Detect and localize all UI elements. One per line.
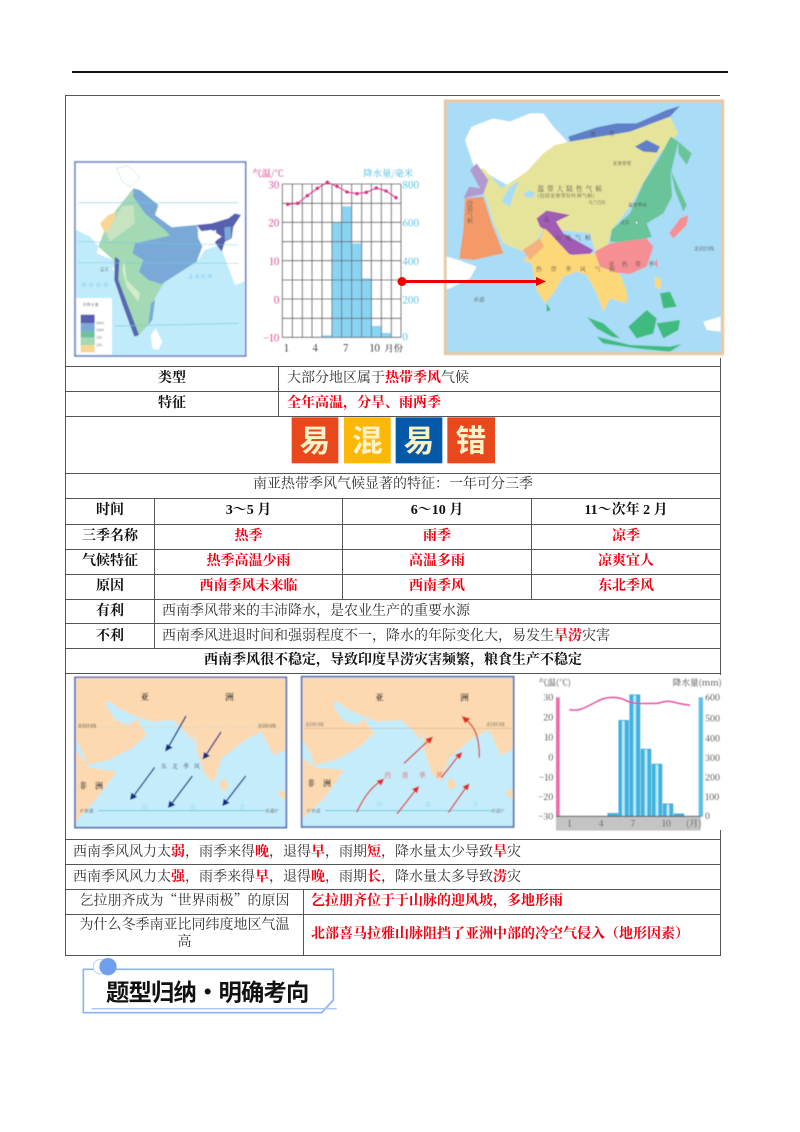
banner: 易混易错 [292, 415, 495, 463]
map: India annual precipitation: 阿拉伯海 [82, 282, 111, 289]
text: 特征 description: 全年高温，分旱、雨两季 [287, 396, 441, 411]
map: northeast monsoon: 度 [190, 802, 196, 811]
map: southwest monsoon: 非洲 [307, 778, 339, 789]
map: northeast monsoon: 赤道0° [265, 807, 279, 814]
map: southwest monsoon: 印 [377, 800, 383, 809]
text: 三季 summary: 南亚热带季风气候显著的特征：一年可分三季 [253, 477, 533, 492]
map: India annual precipitation: 1000 [96, 329, 104, 334]
text: 类型 description: 大部分地区属于热带季风气候 [287, 371, 469, 386]
climate chart: temperature and precipitation: 0 [274, 292, 280, 306]
map: Asia climate types: 高 [543, 215, 555, 224]
map: Asia climate types: 热带季风气候 [536, 265, 624, 274]
banner: 易混易错: 易 [300, 415, 330, 460]
map: southwest monsoon: 北回归线 [486, 721, 505, 728]
cell: 11~2月: 11～次年 2 月 [584, 503, 668, 518]
climate chart: temperature and precipitation: 10 [269, 254, 280, 268]
map: Asia climate types: 沙漠气候 [465, 199, 474, 225]
climate chart: temperature and precipitation: 7 [343, 340, 348, 354]
text: 风力太强: 西南季风风力太强，雨季来得早，退得晚，雨期长，降水量太多导致涝灾 [73, 870, 521, 885]
cell: 高温多雨: 高温多雨 [409, 554, 465, 569]
map: India annual precipitation: 孟加拉湾 [188, 273, 214, 280]
map: southwest monsoon [302, 677, 514, 827]
climate chart: monsoon region temperature and precipitation: 7 [630, 817, 635, 830]
climate chart: monsoon region temperature and precipitation: (月) [686, 817, 702, 830]
map: Asia climate types: 山地气候 [555, 233, 595, 242]
map: southwest monsoon: 0°赤道 [307, 807, 321, 814]
map: Asia climate types: 北京 [621, 219, 630, 226]
map: southwest monsoon: 洲 [460, 692, 469, 704]
banner: 易混易错: 混 [352, 415, 383, 460]
map: India annual precipitation: 200 [96, 344, 102, 349]
text: 风力太弱: 西南季风风力太弱，雨季来得晚，退得早，雨期短，降水量太少导致旱灾 [73, 845, 521, 860]
climate chart: monsoon region temperature and precipitation: 0 [548, 750, 553, 763]
row: 原因: 原因 [96, 579, 124, 594]
climate chart: monsoon region temperature and precipitation: 气温(℃) [539, 676, 571, 688]
section banner [83, 958, 337, 1013]
map: northeast monsoon: 非洲 [79, 781, 111, 792]
climate chart: monsoon region temperature and precipitation: 300 [705, 751, 720, 764]
map: Asia climate types: (包括亚寒带针叶林气候) [537, 192, 595, 199]
cell: 西南季风未来临: 西南季风未来临 [200, 579, 298, 594]
text: 乞拉朋齐 question: 乞拉朋齐成为“世界雨极”的原因 [80, 890, 290, 910]
climate chart: monsoon region temperature and precipitation: 400 [705, 731, 720, 744]
map: Asia climate types [445, 101, 723, 354]
climate chart: monsoon region temperature and precipitation: −30 [538, 810, 553, 823]
climate chart: monsoon region temperature and precipitation: −10 [539, 770, 553, 783]
text: 冬季气温 answer: 北部喜马拉雅山脉阻挡了亚洲中部的冷空气侵入（地形因素） [311, 927, 689, 942]
cell: 凉爽宜人: 凉爽宜人 [598, 554, 654, 569]
text: 有利 description: 西南季风带来的丰沛降水，是农业生产的重要水源 [162, 604, 470, 619]
climate chart: monsoon region temperature and precipitation: 1 [567, 817, 572, 830]
map: southwest monsoon: 西南季风 [384, 769, 454, 779]
map: Asia climate types: 温带季风 [628, 202, 647, 209]
map: southwest monsoon: 北回归线 [305, 721, 324, 728]
cell: 6~10月: 6～10 月 [411, 503, 463, 518]
climate chart: temperature and precipitation: 0 [402, 330, 408, 344]
map: Asia climate types: 赤道 [473, 295, 485, 304]
cell: 凉季: 凉季 [612, 529, 640, 544]
climate chart: temperature and precipitation: 600 [402, 216, 419, 230]
climate chart: monsoon region temperature and precipitation: 0 [705, 809, 710, 822]
text: 不利 description: 西南季风进退时间和强弱程度不一，降水的年际变化大，易发生旱涝灾害 [162, 629, 610, 644]
map: northeast monsoon [75, 677, 286, 828]
climate chart: monsoon region temperature and precipitation: 4 [599, 817, 604, 830]
climate chart: monsoon region temperature and precipitation: 500 [705, 712, 720, 725]
arrow: red pointer from chart to South Asia [398, 277, 546, 286]
climate chart: temperature and precipitation: 气温/℃ [252, 166, 284, 180]
map: northeast monsoon: 北回归线 [78, 722, 97, 729]
climate chart: monsoon region temperature and precipitation: 600 [705, 691, 720, 704]
row: 不利: 不利 [96, 629, 124, 644]
climate chart: monsoon region temperature and precipitation: 降水量(mm) [673, 676, 722, 688]
map: Asia climate types: 亚寒带带 [613, 160, 632, 167]
row: 类型: 类型 [158, 371, 186, 386]
climate chart: monsoon region temperature and precipitation: 30 [543, 691, 553, 704]
map: northeast monsoon: 印 [142, 802, 148, 811]
banner: 易混易错: 错 [456, 415, 486, 460]
climate chart: monsoon region temperature and precipitation: 20 [543, 711, 553, 724]
cell: 西南季风: 西南季风 [409, 579, 465, 594]
cell: 雨季: 雨季 [423, 529, 451, 544]
climate chart: monsoon region temperature and precipitation: 100 [705, 790, 719, 803]
map: northeast monsoon: 0°赤道 [80, 807, 94, 814]
climate chart: temperature and precipitation: 20 [268, 216, 280, 230]
row: 时间: 时间 [96, 503, 124, 518]
text: 季风不稳定 summary: 西南季风很不稳定，导致印度旱涝灾害频繁，粮食生产不稳定 [204, 653, 582, 668]
map: Asia climate types: 寒带 [590, 129, 628, 138]
map: India annual precipitation: 500 [96, 336, 102, 341]
climate chart: temperature and precipitation: −10 [263, 331, 280, 345]
map: India annual precipitation [75, 162, 246, 356]
climate chart: temperature and precipitation: 200 [402, 292, 419, 306]
climate chart: monsoon region temperature and precipitation: 200 [705, 770, 720, 783]
map: southwest monsoon: 亚 [375, 692, 384, 704]
climate chart: temperature and precipitation: 400 [402, 254, 419, 268]
map: Asia climate types: 北回归线 [694, 246, 714, 253]
climate chart: temperature and precipitation: 30 [268, 177, 280, 191]
map: India annual precipitation: 孟买 [100, 266, 109, 273]
cell: 3~5月: 3～5 月 [226, 503, 271, 518]
map: Asia climate types: 温带大陆性气候 [537, 183, 605, 193]
section banner: 题型归纳·明确考向 [106, 974, 309, 1008]
banner: 易混易错: 易 [404, 415, 434, 460]
climate chart: monsoon region temperature and precipitation: 10 [544, 731, 553, 744]
map: northeast monsoon: 亚 [140, 691, 149, 703]
row: 三季名称: 三季名称 [82, 529, 138, 544]
map: southwest monsoon: 洋 [472, 800, 478, 809]
climate chart: monsoon region temperature and precipitation: 10 [662, 817, 671, 830]
map: northeast monsoon: 洋 [239, 802, 245, 811]
climate chart: temperature and precipitation: 1 [284, 340, 289, 354]
cell: 东北季风: 东北季风 [598, 579, 654, 594]
climate chart: temperature and precipitation: 4 [312, 340, 318, 354]
map: Asia climate types: 亚热带季 [608, 260, 662, 269]
climate chart: temperature and precipitation: 10 [370, 340, 380, 354]
text: 乞拉朋齐 answer: 乞拉朋齐位于于山脉的迎风坡，多地形雨 [311, 894, 563, 909]
map: India annual precipitation: 年降水量 [83, 301, 99, 308]
row: 有利: 有利 [96, 604, 124, 619]
map: Asia climate types: 乌兰巴托 [588, 199, 606, 206]
climate chart: monsoon region temperature and precipitation [538, 676, 722, 831]
climate chart: temperature and precipitation [252, 166, 419, 354]
climate chart: temperature and precipitation: 降水量/毫米 [363, 166, 414, 180]
row: 气候特征: 气候特征 [82, 554, 138, 569]
text: 冬季气温 question: 为什么冬季南亚比同纬度地区气温高 [80, 918, 290, 950]
map: northeast monsoon: 东北季风 [161, 761, 205, 770]
map: southwest monsoon: 赤道0° [491, 807, 505, 814]
climate chart: monsoon region temperature and precipitation: −20 [538, 790, 553, 803]
map: northeast monsoon: 北回归线 [257, 722, 276, 729]
map: southwest monsoon: 度 [425, 800, 431, 809]
map: India annual precipitation: 3000 [96, 322, 104, 327]
climate chart: temperature and precipitation: 月份 [384, 340, 404, 354]
row: 特征: 特征 [158, 396, 186, 411]
cell: 热季高温少雨: 热季高温少雨 [206, 554, 290, 569]
map: northeast monsoon: 洲 [225, 691, 234, 703]
cell: 热季: 热季 [234, 529, 262, 544]
climate chart: temperature and precipitation: 800 [402, 177, 419, 191]
